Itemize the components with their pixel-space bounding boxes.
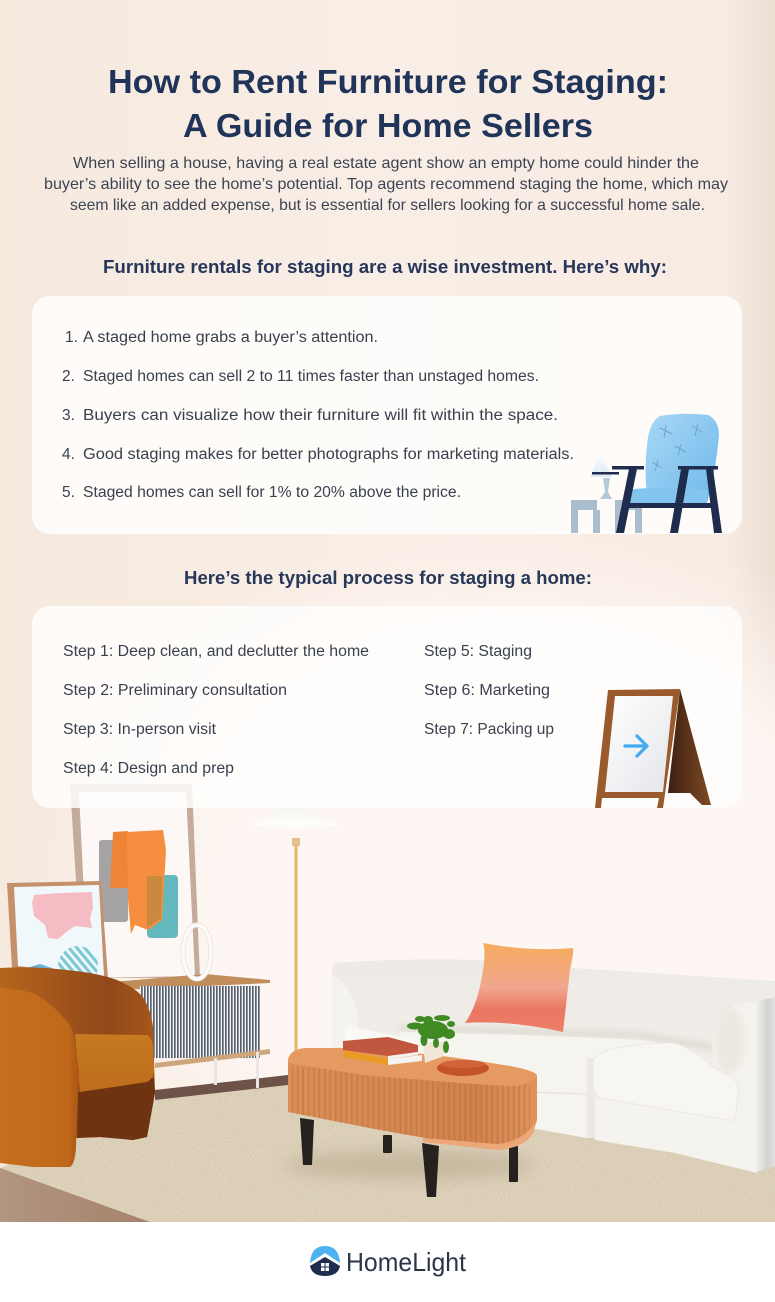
steps column one: Step 1: Deep clean, and declutter the home [63,643,369,660]
numbered list: Good staging makes for better photographs for marketing materials. [83,446,574,463]
chair back [0,967,155,1140]
steps column two [424,643,554,738]
numbered list: Buyers can visualize how their furniture will fit within the space. [83,407,558,424]
numbered list: 5. [62,484,75,501]
under seat shadow [77,1078,155,1140]
right seat cushion [593,1043,738,1120]
potted plant [407,1015,455,1063]
sofa [332,959,775,1173]
icon: house logo [310,1246,340,1276]
books [343,1027,422,1065]
icon: arrow [625,736,647,756]
sideboard [112,974,270,1088]
coffee table [288,1048,537,1197]
seat shadow [400,1028,715,1048]
sofa back [332,959,775,1100]
icon: sandwich board sign [595,689,711,808]
numbered list: Staged homes can sell 2 to 11 times faster than unstaged homes. [83,368,539,385]
intro paragraph: When selling a house, having a real estate agent show an empty home could hinder the [73,155,699,172]
title: A Guide for Home Sellers [183,108,593,145]
steps column one [63,643,369,777]
pillow [465,943,573,1032]
armchair [0,967,155,1167]
chair arm [0,988,79,1167]
numbered list: 1. [65,329,78,346]
steps column two: Step 7: Packing up [424,721,554,738]
white ring vase [183,925,211,979]
steps column two: Step 6: Marketing [424,682,550,699]
intro paragraph [44,155,728,214]
arm side [755,997,775,1172]
icon: blue armchair [612,414,722,533]
carpet floor [0,1085,775,1222]
seat cushion [75,1034,154,1092]
arm front [712,1002,755,1172]
steps column one: Step 3: In-person visit [63,721,217,738]
table legs [300,1118,518,1197]
title [108,64,668,145]
numbered list: 4. [62,446,75,463]
numbered list: Staged homes can sell for 1% to 20% above the price. [83,484,461,501]
intro paragraph: seem like an added expense, but is essential for sellers looking for a successful home sale. [70,197,705,214]
icon: side table and lamp [571,452,642,533]
skirting board [155,1075,288,1100]
heading: why: Furniture rentals for staging are a wise investment. Here’s why: [103,257,667,277]
numbered list: A staged home grabs a buyer’s attention. [83,329,378,346]
floor lamp [250,801,340,1051]
heading: process: Here’s the typical process for staging a home: [184,568,592,588]
footer [0,1222,775,1302]
numbered list: 2. [62,368,75,385]
right base [595,1098,757,1173]
bowl [437,1060,489,1076]
illustration: living room scene [0,784,775,1222]
intro paragraph: buyer’s ability to see the home’s potential. Top agents recommend staging the home, which may [44,176,728,193]
steps column one: Step 2: Preliminary consultation [63,682,287,699]
title: How to Rent Furniture for Staging: [108,64,668,101]
numbered list [62,329,574,501]
table body [288,1060,537,1147]
logo: HomeLight: HomeLight [346,1247,467,1277]
small framed map print [7,881,108,986]
left seat cushion and base [400,1032,680,1138]
panel: reasons [32,296,742,534]
large framed painting [70,784,200,978]
panel: process steps [32,606,742,808]
table top [288,1048,537,1086]
numbered list: 3. [62,407,75,424]
steps column two: Step 5: Staging [424,643,532,660]
steps column one: Step 4: Design and prep [63,760,234,777]
